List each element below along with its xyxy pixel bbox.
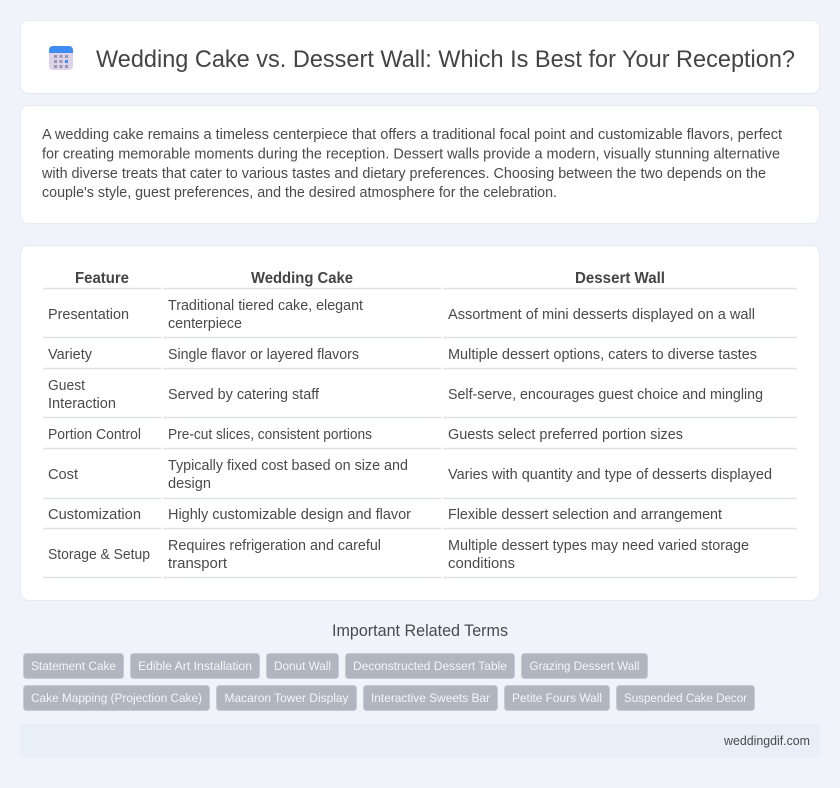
row: customization [48, 507, 722, 523]
related terms tags: Interactive Sweets Bar [371, 691, 490, 705]
related terms tags [24, 654, 754, 710]
row: variety: Multiple dessert options, caters to diverse tastes [448, 347, 757, 363]
related terms tags: Suspended Cake Decor [624, 691, 747, 705]
table header: Wedding Cake [251, 270, 353, 287]
related terms tags: Cake Mapping (Projection Cake) [31, 691, 202, 705]
row: presentation: Traditional tiered cake, elegant [168, 298, 363, 314]
row: guest interaction: Guest [48, 378, 85, 394]
row: cost: Cost [48, 467, 78, 483]
related terms tags: Petite Fours Wall [512, 691, 602, 705]
description text: for creating memorable moments during the reception. Dessert walls provide a modern, visually stunning alternative [42, 146, 780, 162]
row: guest interaction: Interaction [48, 396, 116, 412]
row: storage and setup: Multiple dessert types may need varied storage [448, 538, 749, 554]
panel: comparison table [20, 246, 820, 600]
related terms heading: Important Related Terms [332, 622, 508, 640]
row: customization: Customization [48, 507, 141, 523]
description text: with diverse treats that cater to various tastes and dietary preferences. Choosing between the two depends on the [41, 166, 766, 182]
row: storage and setup: conditions [448, 556, 515, 572]
row: storage and setup: transport [168, 556, 227, 572]
row: cost: Typically fixed cost based on size and [168, 458, 408, 474]
row: presentation: centerpiece [168, 316, 242, 332]
row: portion control [48, 427, 683, 443]
row: cost [48, 458, 772, 492]
row: customization: Highly customizable design and flavor [168, 507, 411, 523]
row: cost: design [168, 476, 211, 492]
related terms tags: Deconstructed Dessert Table [353, 659, 507, 673]
table header: Feature [75, 270, 129, 287]
row: customization: Flexible dessert selection and arrangement [448, 507, 722, 523]
related terms tags: Grazing Dessert Wall [530, 659, 640, 673]
row: guest interaction [48, 378, 763, 412]
row: portion control: Portion Control [48, 427, 141, 443]
table header: Dessert Wall [575, 270, 665, 287]
row: portion control: Guests select preferred portion sizes [448, 427, 683, 443]
row: storage and setup: Requires refrigeration and careful [168, 538, 381, 554]
row: variety [48, 347, 757, 363]
footer site name: weddingdif.com [723, 734, 810, 748]
title: Wedding Cake vs. Dessert Wall: Which Is Best for Your Reception? [96, 46, 795, 73]
footer bar [20, 724, 820, 758]
row: storage and setup [48, 538, 749, 572]
description text: A wedding cake remains a timeless centerpiece that offers a traditional focal point and customizable flavors, perfect [42, 127, 782, 143]
row: guest interaction: Served by catering staff [168, 387, 320, 403]
row: variety: Single flavor or layered flavors [168, 347, 359, 363]
row: portion control: Pre-cut slices, consistent portions [168, 427, 372, 443]
icon: calendar [49, 46, 73, 70]
row: presentation: Presentation [48, 307, 129, 323]
related terms tags: Donut Wall [274, 659, 331, 673]
row: presentation [48, 298, 755, 332]
header panel [20, 20, 820, 94]
row: guest interaction: Self-serve, encourages guest choice and mingling [448, 387, 763, 403]
related terms tags: Statement Cake [31, 659, 116, 673]
row: variety: Variety [48, 347, 93, 363]
description text: couple's style, guest preferences, and the desired atmosphere for the celebration. [42, 185, 557, 201]
panel: description [20, 106, 820, 224]
row: presentation: Assortment of mini desserts displayed on a wall [448, 307, 755, 323]
related terms tags: Macaron Tower Display [224, 691, 349, 705]
table header [75, 270, 665, 287]
row: storage and setup: Storage & Setup [48, 547, 150, 563]
row: cost: Varies with quantity and type of desserts displayed [448, 467, 772, 483]
related terms tags: Edible Art Installation [138, 659, 252, 673]
description text [41, 127, 782, 201]
